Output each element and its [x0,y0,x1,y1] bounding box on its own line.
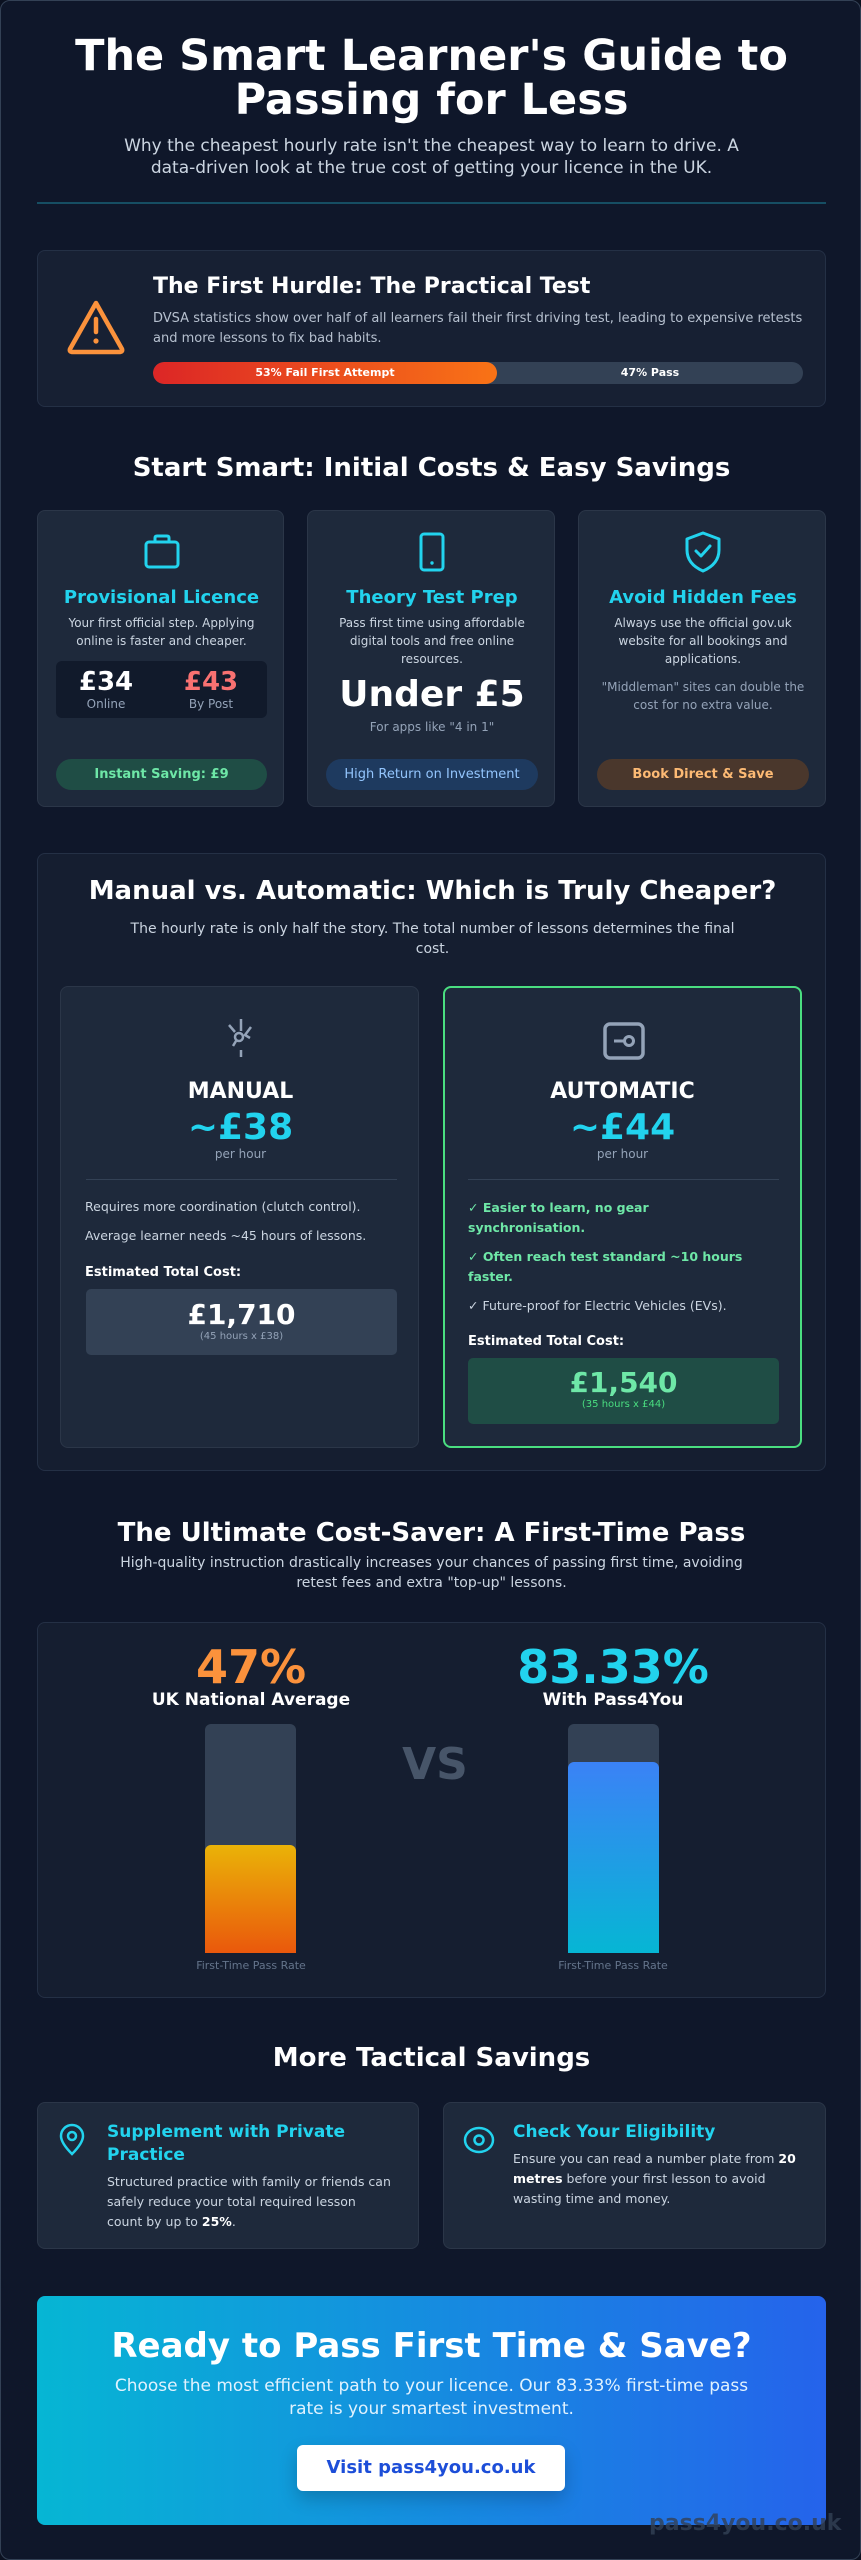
price comparison: Online [87,697,125,711]
description: Always use the official gov.uk website for all bookings and applications. [614,616,792,666]
card: eligibility [443,2102,826,2249]
text [107,2174,391,2229]
price comparison: £43 [184,667,238,697]
heading: start smart: Start Smart: Initial Costs & Easy Savings [133,453,730,483]
card: manual: per hour [215,1147,266,1161]
title [75,31,788,125]
pill: book direct: Book Direct & Save [632,767,774,782]
panel: pass rate comparison [37,1622,826,1998]
pill: book direct [597,759,809,790]
bar: fail vs pass [153,362,803,384]
card: hidden fees [578,510,826,807]
icon: eye [464,2126,494,2154]
cta banner [37,2296,826,2525]
heading: Manual vs. Automatic: Which is Truly Cheaper? [89,876,776,906]
title: Avoid Hidden Fees [609,587,797,608]
bar: fail vs pass: 47% Pass [621,366,679,379]
panel: pass rate comparison: First-Time Pass Rate [558,1959,668,1972]
bar: pass4you [568,1724,659,1953]
price comparison: £34 [79,667,133,697]
title: Supplement with Private Practice [107,2122,345,2165]
total box: (45 hours x £38) [200,1331,283,1342]
price: ~£38 [188,1107,293,1148]
description: Your first official step. Applying online is faster and cheaper. [68,616,255,648]
card: manual: Estimated Total Cost: [85,1265,241,1280]
pill: ROI [326,759,538,790]
pill: instant saving: Instant Saving: £9 [94,767,229,782]
title: Provisional Licence [64,587,259,608]
card: automatic: ✓ Future-proof for Electric Vehicles (EVs). [468,1298,727,1313]
panel: manual vs automatic [37,853,826,1471]
subtitle: High-quality instruction drastically increases your chances of passing first time, avoiding retest fees and extra "top-up" lessons. [120,1555,743,1591]
total box [86,1289,397,1355]
card: theory test prep: For apps like "4 in 1" [370,720,494,734]
cta heading: Ready to Pass First Time & Save? [111,2326,752,2366]
bullets: ✓ Easier to learn, no gear synchronisation. [468,1200,649,1235]
button: Visit pass4you.co.uk [327,2457,535,2478]
title: Theory Test Prep [346,587,518,608]
title: Passing for Less [235,75,628,125]
pill: ROI: High Return on Investment [344,767,520,782]
text: Requires more coordination (clutch control). [85,1199,361,1214]
price: ~£44 [570,1107,675,1148]
description: Pass first time using affordable digital tools and free online resources. [339,616,525,666]
card: provisional licence [37,510,284,807]
icon: map pin [60,2124,84,2156]
card: automatic: per hour [597,1147,648,1161]
icon: key box [603,1022,645,1060]
card: theory test prep [307,510,555,807]
panel: pass rate comparison: UK National Average [152,1690,350,1710]
heading: The First Hurdle: The Practical Test [153,274,590,299]
total box [468,1358,779,1424]
heading: more tactical savings: More Tactical Savings [273,2043,590,2073]
text: DVSA statistics show over half of all learners fail their first driving test, leading to expensive retests and more lessons to fix bad habits. [153,311,802,346]
text: Ensure you can read a number plate from 20 metres before your first lesson to avoid wasting time and money. [513,2151,796,2206]
total box: £1,710 [187,1298,296,1331]
card: automatic: ✓ Often reach test standard ~10 hours faster. [468,1249,742,1284]
icon: shield [686,532,720,572]
card: automatic [443,986,802,1448]
text: count by up to 25%. [107,2214,236,2229]
title: The Smart Learner's Guide to [75,31,788,81]
label: MANUAL [188,1079,293,1104]
label: AUTOMATIC [550,1079,695,1104]
icon: phone [420,532,444,572]
button [297,2445,565,2491]
card: hidden fees: "Middleman" sites can double the cost for no extra value. [602,680,804,712]
panel: first hurdle [37,250,826,407]
price comparison [56,661,267,718]
text: Structured practice with family or friends can safely reduce your total required lesson [107,2174,391,2209]
stat: national average: 47% [196,1640,306,1694]
vs: VS [402,1739,468,1790]
heading: ultimate cost-saver: The Ultimate Cost-Saver: A First-Time Pass [118,1518,745,1548]
card: manual [60,986,419,1448]
panel: pass rate comparison: First-Time Pass Rate [196,1959,306,1972]
subtitle: Why the cheapest hourly rate isn't the cheapest way to learn to drive. A data-driven look at the true cost of getting your licence in the UK. [124,136,739,178]
card: private practice [37,2102,419,2249]
cta text: Choose the most efficient path to your licence. Our 83.33% first-time pass rate is your smartest investment. [115,2376,748,2419]
pill: instant saving [56,759,267,790]
card: automatic: Estimated Total Cost: [468,1334,624,1349]
price comparison: By Post [189,697,233,711]
bar: fail vs pass: 53% Fail First Attempt [255,366,395,379]
total box: (35 hours x £44) [582,1399,665,1410]
big number: Under £5 [339,674,525,715]
watermark: pass4you.co.uk [649,2511,841,2536]
panel: pass rate comparison: With Pass4You [543,1690,683,1710]
total box: £1,540 [569,1366,678,1399]
bar: national [205,1724,296,1953]
subtitle: The hourly rate is only half the story. The total number of lessons determines the final cost. [131,921,734,957]
stat: pass4you: 83.33% [517,1640,709,1694]
title: Check Your Eligibility [513,2122,715,2142]
icon: warning [68,300,124,354]
icon: gear stick [228,1019,252,1057]
card: manual: Average learner needs ~45 hours of lessons. [85,1228,366,1243]
icon: wallet [144,534,180,568]
